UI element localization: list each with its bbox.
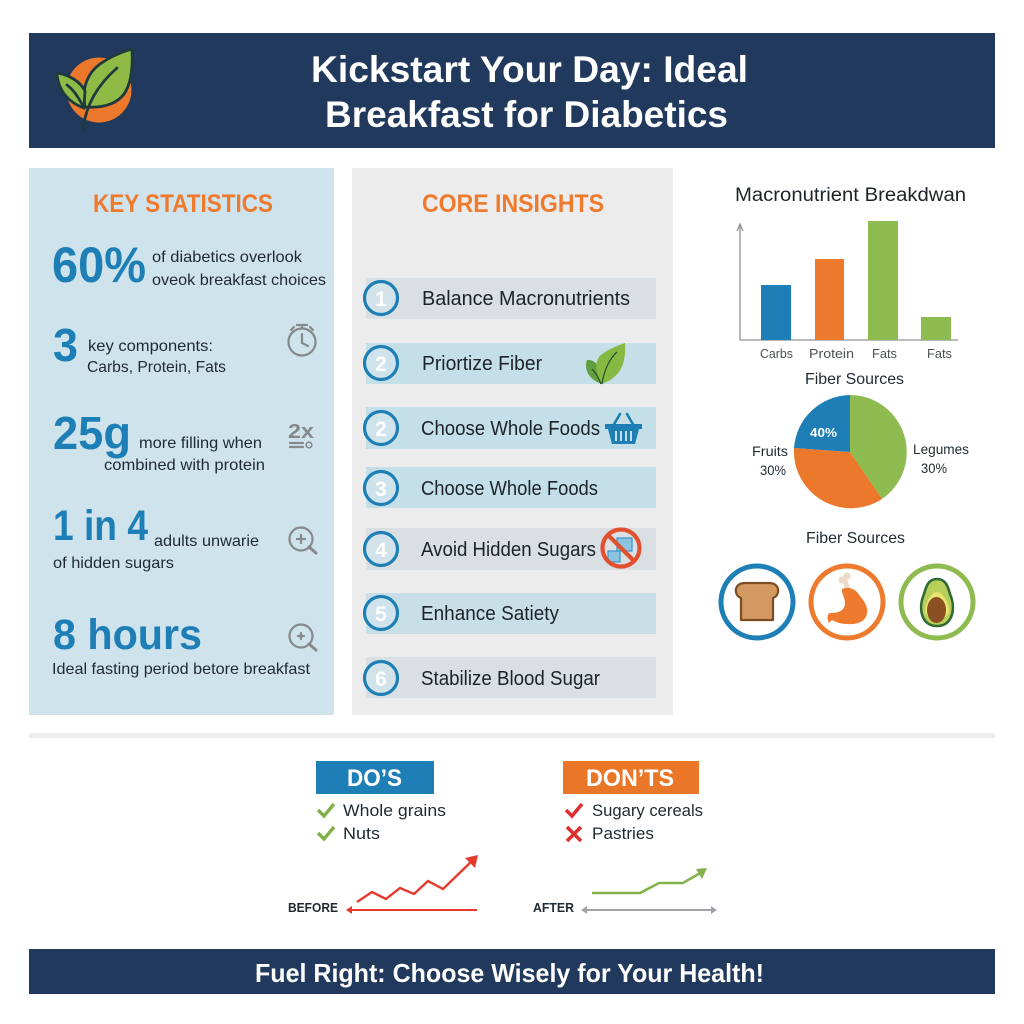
panel: do's: Whole grains xyxy=(343,801,446,820)
chart: macronutrient breakdown: Protein xyxy=(809,346,854,361)
stat: 1 in 4: of hidden sugars xyxy=(53,555,174,572)
insight 7 xyxy=(364,657,656,698)
panel: don'ts: DON’TS xyxy=(586,765,674,792)
chart: macronutrient breakdown: Fats xyxy=(927,346,952,361)
panel: don'ts xyxy=(563,761,703,843)
icon: no sugar xyxy=(602,530,640,566)
food icons xyxy=(721,530,973,638)
insight 3: Choose Whole Foods xyxy=(421,418,600,440)
stat: 8 hours xyxy=(52,611,311,678)
insight 3 xyxy=(364,407,656,449)
icon: leaf xyxy=(586,343,625,384)
chart: macronutrient breakdown xyxy=(735,185,966,361)
icon: red cross xyxy=(567,827,581,841)
stat: 25g: combined with protein xyxy=(104,457,265,474)
insight 4: 3 xyxy=(375,478,387,501)
stat: 60%: oveok breakfast choices xyxy=(152,272,326,289)
insight 2: 2 xyxy=(375,353,387,376)
chart: after xyxy=(533,868,717,915)
icon: basket xyxy=(605,414,642,444)
chart: fiber sources pie: Fruits xyxy=(752,444,788,459)
insight 4 xyxy=(364,467,656,508)
icon: magnifier xyxy=(290,624,316,650)
icon: drumstick xyxy=(811,566,883,638)
title xyxy=(311,49,748,135)
icon: red check xyxy=(566,804,582,816)
footer banner: Fuel Right: Choose Wisely for Your Health! xyxy=(255,958,764,988)
insight 6: Enhance Satiety xyxy=(421,603,559,625)
panel: key statistics xyxy=(29,168,334,715)
stat: 8 hours: 8 hours xyxy=(53,611,202,659)
icon: check xyxy=(318,827,334,839)
stat: 3 components xyxy=(53,319,226,376)
stat: 8 hours: Ideal fasting period betore breakfast xyxy=(52,661,311,678)
insight 1 xyxy=(364,278,656,319)
stat: 25g xyxy=(53,407,265,474)
icon: check xyxy=(318,804,334,816)
chart: fiber sources pie: Legumes xyxy=(913,442,969,457)
panel: do's: DO’S xyxy=(347,765,402,792)
chart: fiber sources pie: 30% xyxy=(921,461,947,476)
chart: fiber sources pie: 30% xyxy=(760,463,786,478)
title: Breakfast for Diabetics xyxy=(325,94,728,135)
insight 5 xyxy=(364,528,656,570)
icon: leaf logo xyxy=(57,49,132,130)
food icons: Fiber Sources xyxy=(806,530,905,547)
chart: before: BEFORE xyxy=(288,901,338,915)
chart title: Macronutrient Breakdwan xyxy=(735,185,966,206)
insight 3: 2 xyxy=(375,418,387,441)
chart: fiber sources pie: 40% xyxy=(810,425,837,440)
icon: magnifier xyxy=(290,528,316,553)
stat: 1 in 4: 1 in 4 xyxy=(53,502,148,550)
panel: core insights xyxy=(352,168,673,715)
insight 5: Avoid Hidden Sugars xyxy=(421,539,596,561)
footer banner xyxy=(29,949,995,994)
stat: 1 in 4: adults unwarie xyxy=(154,533,259,550)
title: Kickstart Your Day: Ideal xyxy=(311,49,748,90)
insight 4: Choose Whole Foods xyxy=(421,478,598,500)
insight 2: Priortize Fiber xyxy=(422,353,542,375)
panel: do's: Nuts xyxy=(343,824,380,843)
divider xyxy=(29,733,995,738)
stat: 3 components: Carbs, Protein, Fats xyxy=(87,359,226,376)
chart: macronutrient breakdown: Carbs xyxy=(760,346,793,361)
chart: fiber sources pie: Fiber Sources xyxy=(805,371,904,388)
header banner xyxy=(29,33,995,148)
stat: 25g: more filling when xyxy=(139,435,262,452)
panel: don'ts: Sugary cereals xyxy=(592,801,703,820)
stat: 3 components: 3 xyxy=(53,319,78,371)
insight 6: 5 xyxy=(375,603,387,626)
icon: stopwatch xyxy=(288,325,316,356)
insight 6 xyxy=(364,593,656,634)
heading: core insights: CORE INSIGHTS xyxy=(422,190,604,218)
stat: 25g: 25g xyxy=(53,407,131,459)
insight 1: 1 xyxy=(375,288,387,311)
insight 1: Balance Macronutrients xyxy=(422,288,630,310)
stat: 60% xyxy=(52,237,326,293)
chart: before xyxy=(288,855,478,915)
chart: macronutrient breakdown: Fats xyxy=(872,346,897,361)
stat: 60%: of diabetics overlook xyxy=(152,249,303,266)
chart: fiber sources pie xyxy=(752,371,969,508)
insight 5: 4 xyxy=(375,539,387,562)
icon: avocado xyxy=(901,566,973,638)
chart: after: AFTER xyxy=(533,901,574,915)
insight 7: Stabilize Blood Sugar xyxy=(421,668,600,690)
panel: don'ts: Pastries xyxy=(592,824,654,843)
icon: toast xyxy=(721,566,793,638)
panel: do's xyxy=(316,761,446,843)
stat: 60%: 60% xyxy=(52,237,146,293)
insight 2 xyxy=(364,343,656,384)
stat: 3 components: key components: xyxy=(88,338,213,355)
icon: 2x: 2x xyxy=(288,421,314,443)
heading: key statistics: KEY STATISTICS xyxy=(93,190,273,218)
stat: 1 in 4 xyxy=(53,502,259,572)
insight 7: 6 xyxy=(375,668,387,691)
